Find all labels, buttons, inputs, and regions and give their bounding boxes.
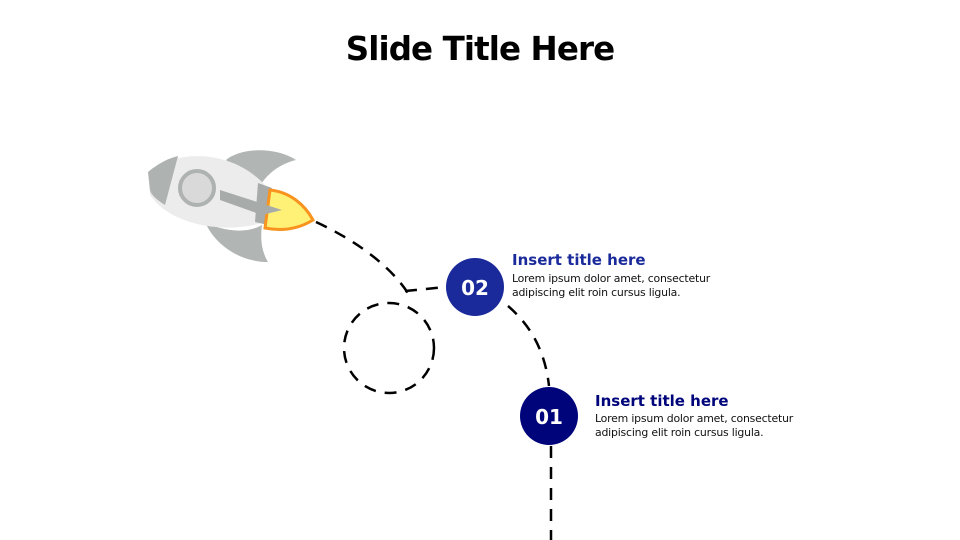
text block 02 — [512, 251, 710, 299]
title: Slide Title Here — [346, 30, 614, 68]
text block 01: adipiscing elit roin cursus ligula. — [595, 426, 763, 439]
marker 01: 01 — [535, 405, 563, 429]
text block 02: Lorem ipsum dolor amet, consectetur — [512, 272, 710, 285]
text block 01: Lorem ipsum dolor amet, consectetur — [595, 412, 793, 425]
marker 01 — [520, 387, 578, 445]
marker 02 — [446, 258, 504, 316]
text block 01 — [595, 392, 794, 439]
text block 02: adipiscing elit roin cursus ligula. — [512, 286, 680, 299]
text block 01: Insert title here — [595, 392, 729, 410]
text block 02: Insert title here — [512, 251, 646, 269]
dashed flight path — [316, 222, 551, 540]
icon: rocket — [148, 150, 313, 262]
marker 02: 02 — [461, 276, 489, 300]
